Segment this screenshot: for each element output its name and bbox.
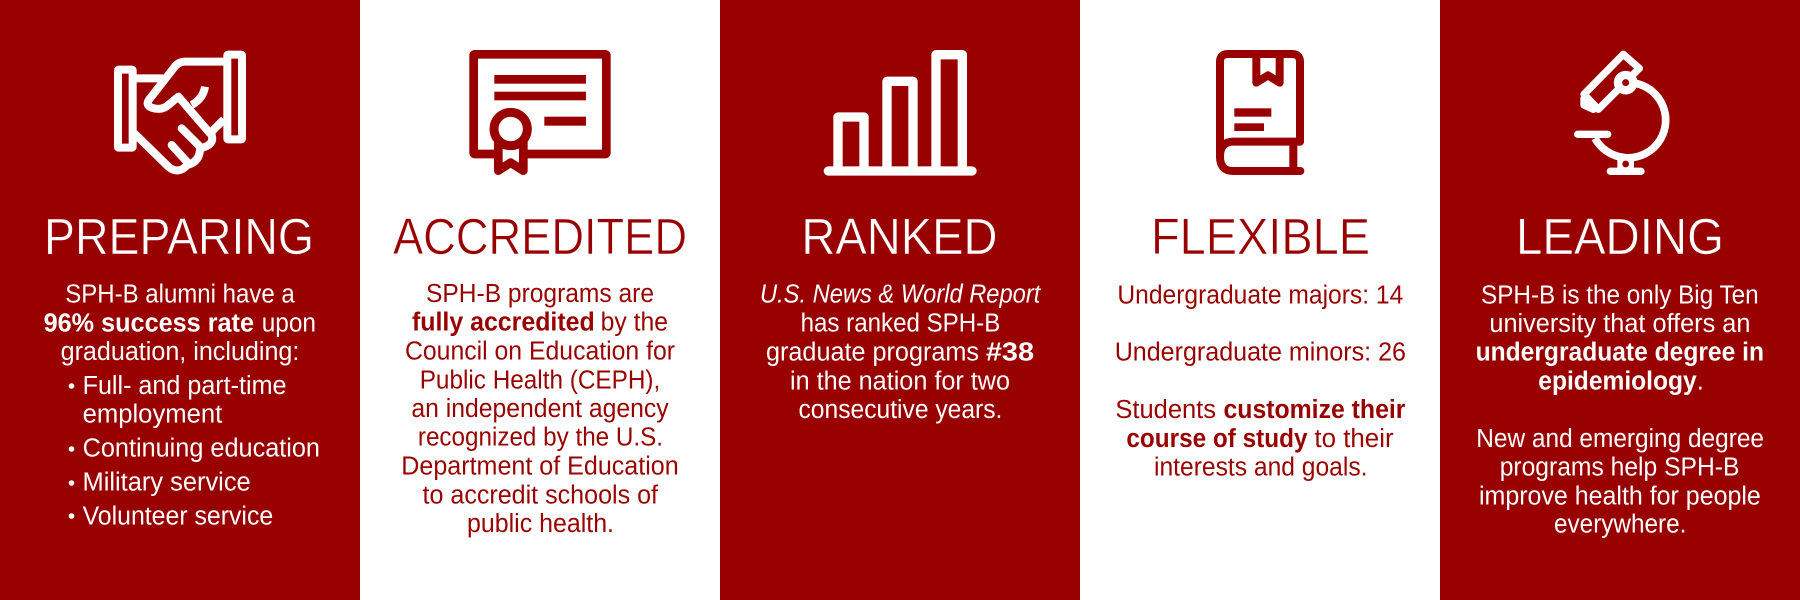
text block: epidemiology degree: university that offers an	[1489, 310, 1750, 338]
text block: ranking: graduate programs	[766, 338, 979, 366]
text block: epidemiology degree: .	[1697, 367, 1704, 395]
icon: microscope	[1578, 54, 1666, 171]
bullet list: outcomes: Continuing education	[83, 435, 320, 463]
text block: ranking: has ranked SPH-B	[801, 309, 1000, 337]
text block: ranking: #38	[986, 338, 1034, 366]
panel: preparing	[0, 0, 360, 600]
text block: accreditation: recognized by the U.S.	[418, 424, 663, 452]
text block: epidemiology degree: undergraduate degree in	[1476, 339, 1764, 367]
icon: certificate	[474, 54, 606, 171]
text block: flexibility: interests and goals.	[1154, 454, 1368, 482]
text block: flexibility: Undergraduate majors: 14	[1117, 281, 1403, 309]
text block: ranking: in the nation for two	[790, 367, 1010, 395]
text block: epidemiology degree: epidemiology	[1538, 367, 1697, 395]
text block: accreditation: fully accredited	[412, 309, 595, 337]
text block: new programs: New and emerging degree	[1476, 425, 1764, 453]
bullet list: outcomes	[69, 372, 320, 530]
text block: preparing intro: SPH-B alumni have a	[65, 281, 296, 309]
bullet list: outcomes: Military service	[82, 469, 251, 497]
text block: accreditation: Council on Education for	[405, 337, 675, 365]
text block: accreditation: SPH-B programs are	[426, 280, 654, 308]
text block: epidemiology degree: SPH-B is the only Big Ten	[1481, 281, 1759, 309]
text block: flexibility: customize their	[1224, 396, 1405, 424]
text block: flexibility	[1115, 281, 1406, 482]
heading: preparing: PREPARING	[44, 208, 314, 265]
text block: accreditation: Public Health (CEPH),	[420, 366, 660, 394]
text block: epidemiology degree	[1476, 281, 1764, 395]
icon: handshake	[118, 55, 242, 170]
text block: ranking: U.S. News & World Report	[760, 281, 1041, 309]
bullet list: outcomes: Volunteer service	[83, 502, 273, 530]
text block: accreditation: to accredit schools of	[422, 481, 659, 509]
heading: leading: LEADING	[1516, 208, 1724, 265]
text block: flexibility: Undergraduate minors: 26	[1115, 339, 1406, 367]
icon: bar chart	[828, 55, 972, 171]
text block: preparing intro	[44, 281, 316, 366]
text block: accreditation: Department of Education	[401, 452, 679, 480]
text block: accreditation: an independent agency	[411, 395, 669, 423]
text block: new programs: programs help SPH-B	[1500, 454, 1739, 482]
text block: preparing intro: upon	[262, 309, 316, 337]
bullet list: outcomes: Full- and part-time	[83, 372, 286, 400]
icon: book	[1220, 54, 1300, 171]
text block: new programs: improve health for people	[1479, 482, 1761, 510]
heading: ranked: RANKED	[801, 208, 998, 265]
text block: accreditation: public health.	[467, 510, 614, 538]
heading: flexible: FLEXIBLE	[1151, 208, 1370, 265]
text block: flexibility: course of study	[1126, 425, 1308, 453]
text block: ranking: consecutive years.	[798, 396, 1002, 424]
heading: accredited: ACCREDITED	[393, 208, 687, 265]
text block: accreditation	[401, 280, 679, 538]
panel: flexible	[1080, 0, 1440, 600]
text block: preparing intro: 96% success rate	[44, 309, 254, 337]
text block: new programs	[1476, 425, 1764, 539]
text block: flexibility: Students	[1115, 396, 1216, 424]
text block: new programs: everywhere.	[1554, 511, 1686, 539]
panel: ranked	[720, 0, 1080, 600]
text block: flexibility: to their	[1314, 425, 1394, 453]
bullet list: outcomes: employment	[83, 401, 222, 429]
panel: leading	[1440, 0, 1800, 600]
text block: preparing intro: graduation, including:	[61, 338, 299, 366]
panel: accredited	[360, 0, 720, 600]
text block: ranking	[760, 281, 1041, 424]
text block: accreditation: by the	[601, 309, 668, 337]
